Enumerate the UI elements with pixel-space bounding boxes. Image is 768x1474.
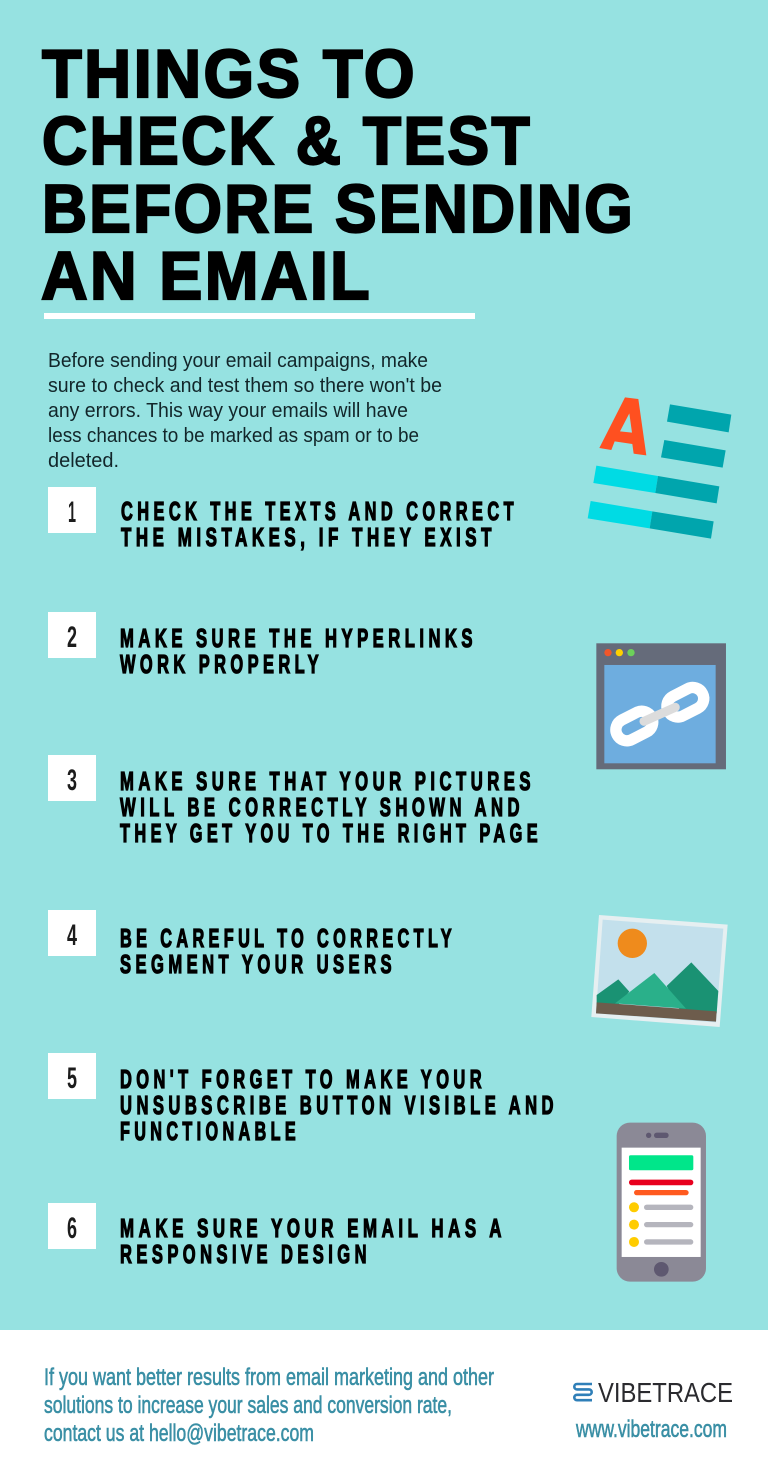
step 5 text: DON'T FORGET TO MAKE YOUR [120,1064,486,1094]
intro paragraph: Before sending your email campaigns, make [48,349,428,372]
step 5 [48,1053,558,1146]
footer call to action [44,1364,494,1447]
title: BEFORE SENDING [42,171,635,247]
icon: smartphone [617,1123,706,1282]
step 5 text: FUNCTIONABLE [120,1116,300,1146]
step 2 [48,612,477,679]
step 2 text [120,623,477,679]
step 4 number box [48,910,96,956]
step 3 text [120,766,542,848]
step 3 [48,755,542,848]
step 6 text: MAKE SURE YOUR EMAIL HAS A [120,1213,506,1243]
intro paragraph: less chances to be marked as spam or to be [48,424,419,447]
step 1 number box: 1 [68,496,76,529]
intro paragraph: sure to check and test them so there won't be [48,374,442,397]
step 2 number box [48,612,96,658]
footer call to action: If you want better results from email marketing and other [44,1364,494,1391]
step 4 [48,910,456,979]
footer call to action: solutions to increase your sales and conversion rate, [44,1392,452,1419]
step 4 text: SEGMENT YOUR USERS [120,949,396,979]
step 1 text: THE MISTAKES, IF THEY EXIST [121,522,496,552]
footer panel [0,1330,768,1474]
title underline [44,313,475,319]
step 2 number box: 2 [67,621,77,654]
step 3 number box [48,755,96,801]
step 3 text: MAKE SURE THAT YOUR PICTURES [120,766,535,796]
intro paragraph: any errors. This way your emails will have [48,399,408,422]
title: THINGS TO [42,36,417,112]
step 2 text: MAKE SURE THE HYPERLINKS [120,623,477,653]
icon: browser window with chain link [596,643,726,769]
step 6 text: RESPONSIVE DESIGN [120,1239,371,1269]
step 4 text: BE CAREFUL TO CORRECTLY [120,923,456,953]
step 6 text [120,1213,506,1269]
step 4 text [120,923,456,979]
logo: Vibetrace: VIBETRACE [598,1377,733,1408]
step 6 [48,1203,506,1269]
step 1 text: CHECK THE TEXTS AND CORRECT [121,496,518,526]
title: CHECK & TEST [42,103,532,179]
title [41,36,635,314]
step 3 number box: 3 [67,764,77,797]
intro paragraph: deleted. [48,449,119,472]
icon: landscape photo [591,915,728,1027]
footer background [0,1330,768,1474]
step 5 number box: 5 [67,1062,77,1095]
step 6 number box: 6 [67,1212,77,1245]
intro paragraph [48,349,442,472]
step 1 number box [48,487,96,533]
step 3 text: WILL BE CORRECTLY SHOWN AND [120,792,524,822]
step 6 number box [48,1203,96,1249]
footer call to action: contact us at hello@vibetrace.com [44,1420,314,1447]
step 1 text [121,496,518,552]
step 1 [48,487,518,552]
icon: text lines with letter A [588,397,731,539]
step 2 text: WORK PROPERLY [120,649,323,679]
title: AN EMAIL [41,238,372,314]
step 5 number box [48,1053,96,1099]
step 4 number box: 4 [67,919,77,952]
step 5 text [120,1064,558,1146]
